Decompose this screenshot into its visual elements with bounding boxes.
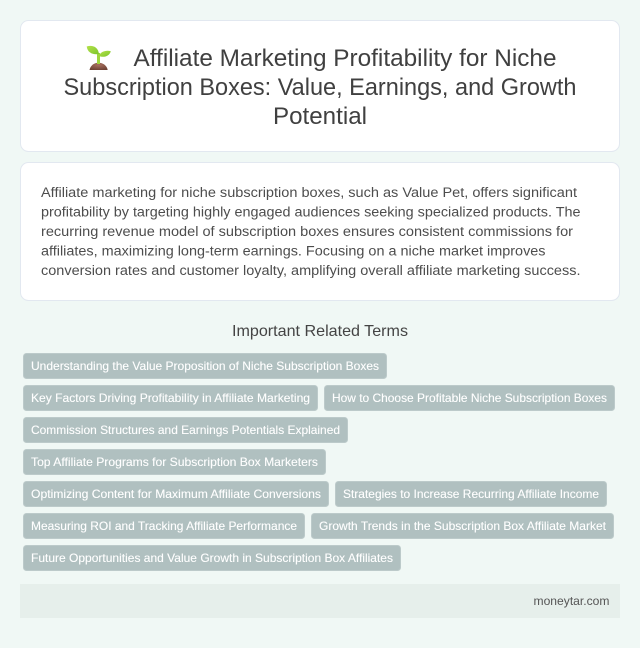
text block: summary paragraph: Affiliate marketing for niche subscription boxes, such as Value Pet, offers significant xyxy=(41,185,577,201)
tag: Optimizing Content for Maximum Affiliate Conversions xyxy=(31,487,321,501)
title: Potential xyxy=(273,103,367,130)
tag: Commission Structures and Earnings Potentials Explained xyxy=(31,423,340,437)
tag xyxy=(24,514,304,538)
text block: summary paragraph: affiliates, maximizing long-term earnings. Focusing on a niche market improves xyxy=(41,244,546,260)
icon: seedling xyxy=(87,46,111,70)
tag xyxy=(24,450,326,474)
text block: summary paragraph: recurring revenue model of subscription boxes ensures consistent commissions for xyxy=(41,224,573,240)
tag xyxy=(336,482,606,506)
text block: summary paragraph: conversion rates and customer loyalty, amplifying overall affiliate marketing success. xyxy=(41,263,580,279)
tag: Key Factors Driving Profitability in Affiliate Marketing xyxy=(31,391,310,405)
tag xyxy=(24,482,328,506)
text block: summary paragraph xyxy=(41,185,581,279)
panel: title card xyxy=(20,20,620,152)
tag: Growth Trends in the Subscription Box Affiliate Market xyxy=(319,519,607,533)
tag: Top Affiliate Programs for Subscription Box Marketers xyxy=(31,455,318,469)
heading: important related terms: Important Related Terms xyxy=(232,323,408,340)
footer xyxy=(20,584,620,618)
tag xyxy=(24,386,318,410)
title: Affiliate Marketing Profitability for Niche xyxy=(134,45,556,72)
footer: moneytar.com xyxy=(534,594,610,608)
tag: Future Opportunities and Value Growth in Subscription Box Affiliates xyxy=(31,551,393,565)
title: Subscription Boxes: Value, Earnings, and Growth xyxy=(64,74,576,101)
tag: Strategies to Increase Recurring Affiliate Income xyxy=(343,487,599,501)
tag xyxy=(24,354,386,378)
tag xyxy=(24,418,348,442)
title xyxy=(64,45,576,130)
tag: Understanding the Value Proposition of Niche Subscription Boxes xyxy=(31,359,379,373)
panel: summary xyxy=(20,162,620,300)
tag xyxy=(24,546,400,570)
tag: How to Choose Profitable Niche Subscription Boxes xyxy=(332,391,607,405)
text block: summary paragraph: profitability by targeting highly engaged audiences seeking specialized products. The xyxy=(41,204,581,220)
tag xyxy=(312,514,614,538)
panel: related term tags xyxy=(24,354,614,570)
tag xyxy=(324,386,614,410)
tag: Measuring ROI and Tracking Affiliate Performance xyxy=(31,519,297,533)
